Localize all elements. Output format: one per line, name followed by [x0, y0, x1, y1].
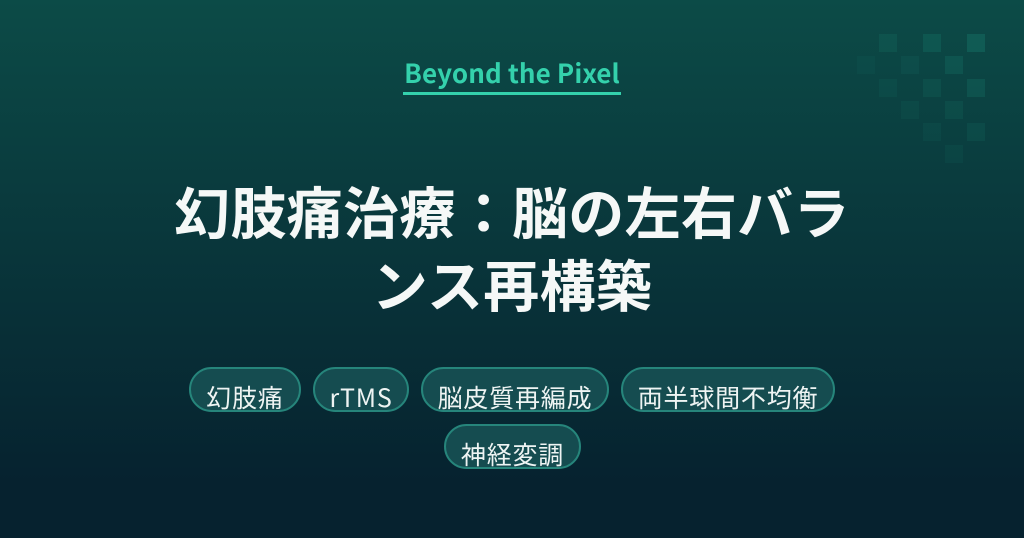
tag: 神経変調	[444, 424, 581, 469]
tag: 両半球間不均衡	[621, 367, 835, 412]
tag: 幻肢痛	[189, 367, 301, 412]
title	[174, 170, 850, 324]
tag: 神経変調: 神経変調	[461, 436, 564, 472]
title: 幻肢痛治療：脳の左右バラ	[174, 170, 850, 251]
tag: 両半球間不均衡: 両半球間不均衡	[638, 379, 818, 415]
title: ンス再構築	[372, 243, 652, 324]
tag: 脳皮質再編成: 脳皮質再編成	[438, 379, 592, 415]
decorative square pattern	[879, 34, 985, 141]
tag: 脳皮質再編成	[421, 367, 609, 412]
brand label: Beyond the Pixel	[404, 54, 620, 91]
tag: 幻肢痛: 幻肢痛	[206, 379, 284, 415]
tag: rTMS: rTMS	[329, 379, 393, 415]
tag: rTMS	[313, 367, 409, 412]
